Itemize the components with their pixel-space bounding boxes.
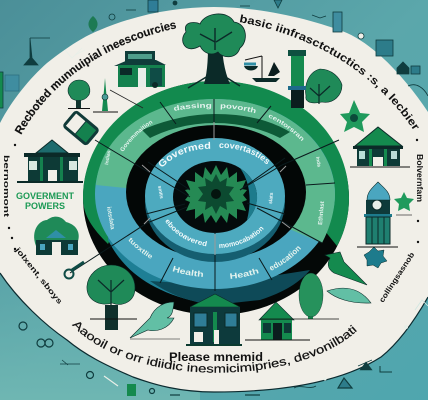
light ring labels: Health [172,266,203,277]
left side label: bernomont [2,155,11,218]
light ring labels: iotsdata [105,206,115,231]
light ring labels: Heath [230,268,259,279]
icon: green shop [114,51,166,88]
light ring labels: Inda [314,156,322,168]
lower left teal wall [108,225,214,305]
circular ring diagram [70,81,349,313]
right side label: Bolvernfam [415,154,424,202]
light ring [95,99,335,289]
light ring labels: povorth [220,104,256,114]
flower [185,165,247,223]
heading text: municipial resources: Recboted munnuipial ineescourcies [14,22,176,134]
inner ring labels [156,142,275,248]
light ring labels [104,102,326,279]
light ring labels: centorsran [268,114,304,141]
icon: leaf [130,302,180,339]
icon: small green house [245,302,310,340]
inner ring labels: slats [268,192,275,204]
government powers label: POWERS [25,201,65,211]
icons: background small top right [240,0,428,96]
right lower label: collingsasnob [377,250,417,304]
ellipse lower edge [0,273,428,392]
icon: tower [288,50,306,108]
icons: background small top [0,0,177,108]
icon: right small dome [367,182,390,200]
outer black base [83,81,349,315]
icon: right tree [306,69,342,104]
light ring labels: education [270,246,301,270]
icon: small slim tree [260,273,339,319]
inner blue ring wall [145,142,285,262]
icon: clock tower right [357,200,398,247]
icon: large tree [183,14,245,88]
black ring [126,125,306,259]
light ring labels: dassing [174,102,212,111]
inner ring labels: smits [156,185,164,199]
light ring labels: Govemmaition [120,120,153,152]
dots [8,139,419,250]
light ring labels: Indias [104,150,113,165]
text: please mnemid: Please mnemid [169,352,263,364]
icon: clock tower [93,78,143,112]
icon: teal flower [364,247,387,268]
government powers label: GOVERMENT [16,191,74,201]
icon: green house with tree [34,217,79,255]
icon: lower left tree [87,265,137,330]
inner blue ring [145,138,285,254]
inner ring labels: covertasties [219,143,270,164]
outer green rim [83,81,349,246]
icon: right top building [350,127,410,167]
inner ring labels: eboeoavered [166,220,207,246]
icon: left building [17,140,83,183]
light ring green upper section [96,99,335,243]
icon: central bottom building [186,294,242,346]
icon: small green star [394,192,414,215]
icon: key line end [64,262,84,278]
icon: scales [244,56,280,82]
inner ring labels: momocabation [219,226,264,248]
divider lines [70,99,339,291]
light ring labels: Ethnlast [318,201,326,225]
light ring labels: tuoxtlie [128,238,152,258]
icon: green leaves [325,252,371,303]
government powers label [16,191,74,211]
left lower label: jolxent, sboys [14,247,62,304]
heading text: basic infrastructure: basic iinfrasctctuctics :s, a lecbier [240,14,419,129]
centre hole [173,161,257,233]
icon: magnifier device [62,109,100,147]
icons: background small bottom [19,300,428,396]
icon: small tree left [68,80,90,109]
inner ring labels: Govermed [158,142,210,166]
icon: star [340,100,370,132]
